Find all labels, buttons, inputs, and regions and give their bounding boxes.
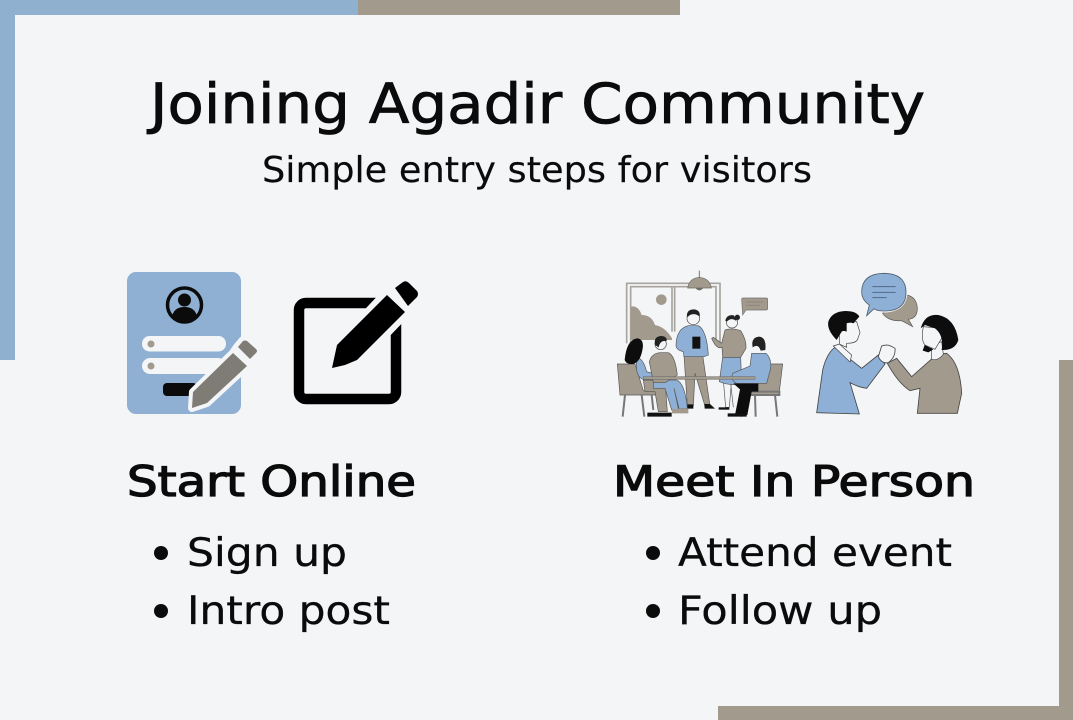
person: standing man (676, 309, 715, 409)
list: in-person steps (646, 531, 952, 634)
frame: top taupe bar (358, 0, 680, 15)
clasped hands (878, 345, 895, 363)
person: woman right (887, 315, 962, 413)
frame: top-left blue corner (0, 0, 358, 360)
panel: start online (127, 272, 418, 634)
list: online steps: Intro post (187, 589, 390, 634)
person: man left (817, 311, 885, 414)
list: online steps (154, 531, 390, 634)
list: in-person steps: Follow up (678, 589, 882, 634)
frame: bottom-right taupe corner (718, 360, 1073, 720)
panel: meet in person (613, 271, 975, 634)
subtitle: Simple entry steps for visitors (262, 150, 812, 191)
heading: start online: Start Online (127, 457, 416, 506)
list: in-person steps: Attend event (678, 531, 952, 576)
person: seated man right (728, 337, 783, 417)
illustration: group meeting (617, 271, 783, 417)
person: seated woman left (617, 338, 672, 417)
table (643, 377, 755, 379)
icon: sign-up form with pencil (127, 272, 257, 414)
heading: meet in person: Meet In Person (613, 457, 975, 506)
title: Joining Agadir Community (147, 72, 925, 136)
person: standing woman (712, 315, 746, 410)
person: seated man left (649, 336, 688, 413)
list: online steps: Sign up (187, 531, 347, 576)
illustration: two people handshake with speech bubbles (817, 273, 962, 414)
icon: edit square (299, 281, 418, 399)
